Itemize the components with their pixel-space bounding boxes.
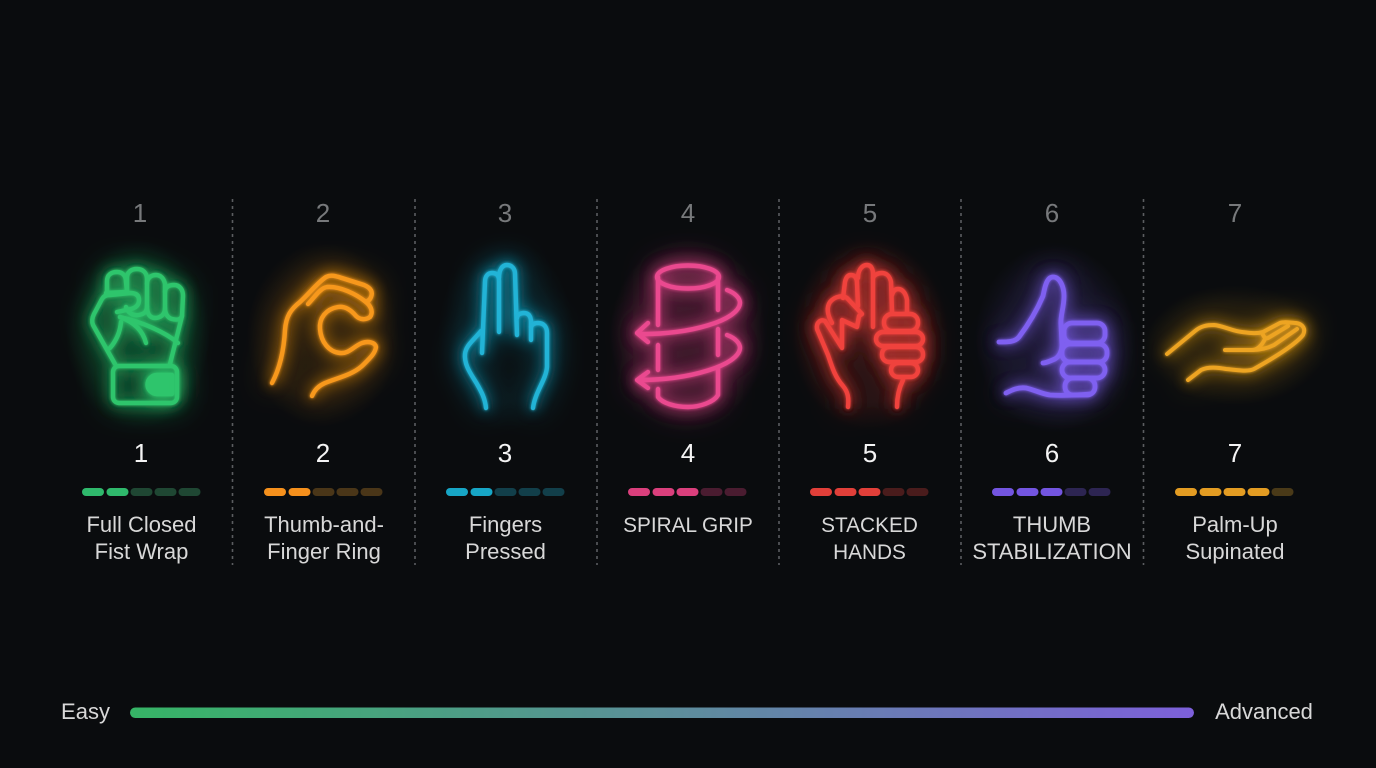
glow 4 (610, 239, 766, 431)
glow 7 (1146, 285, 1326, 405)
glow 5 (792, 239, 948, 431)
difficulty meter 3 (446, 488, 564, 496)
column 7: palm-up supinated (1146, 198, 1326, 564)
column 4: spiral grip (610, 198, 766, 537)
label 2: Finger Ring (267, 539, 381, 564)
number 1: 1 (134, 438, 148, 468)
icon: pressed fingers (465, 265, 547, 408)
step number 6: 6 (1045, 198, 1059, 228)
icon: thumb and finger ring (272, 276, 376, 396)
gradient scale bar (130, 708, 1194, 718)
column 2: thumb-and-finger ring (247, 198, 399, 564)
difficulty meter 4 (628, 488, 746, 496)
label 5: HANDS (833, 541, 906, 564)
difficulty meter 1 (82, 488, 200, 496)
difficulty meter 2 (264, 488, 382, 496)
label 7: Palm-Up (1192, 512, 1278, 537)
glow 2 (247, 243, 399, 427)
step number 5: 5 (863, 198, 877, 228)
icon: cylinder with spiral arrows (637, 266, 740, 407)
number 5: 5 (863, 438, 877, 468)
column 6: thumb stabilization (972, 198, 1135, 564)
number 2: 2 (316, 438, 330, 468)
number 7: 7 (1228, 438, 1242, 468)
icon: stacked hands (817, 265, 923, 407)
label 2: Thumb-and- (264, 512, 384, 537)
difficulty meter 6 (992, 488, 1110, 496)
difficulty meter 7 (1175, 488, 1294, 496)
difficulty meter 5 (810, 488, 928, 496)
label 3: Fingers (469, 512, 542, 537)
label 1: Fist Wrap (95, 539, 188, 564)
label: advanced: Advanced (1215, 699, 1313, 724)
step number 4: 4 (681, 198, 695, 228)
icon: open palm up (1167, 322, 1304, 380)
glow 1 (66, 241, 210, 429)
difficulty scale (61, 699, 1313, 724)
glow 3 (438, 239, 574, 431)
number 3: 3 (498, 438, 512, 468)
label: easy: Easy (61, 699, 110, 724)
label 6: THUMB (1013, 512, 1091, 537)
column 1: full closed fist wrap (66, 198, 210, 564)
icon: thumbs up fist (999, 277, 1107, 395)
label 3: Pressed (465, 539, 546, 564)
icon: closed fist (92, 269, 183, 403)
label 4: SPIRAL GRIP (623, 514, 753, 537)
column 5: stacked hands (792, 198, 948, 564)
label 1: Full Closed (86, 512, 197, 537)
column 3: fingers pressed (438, 198, 574, 564)
step number 7: 7 (1228, 198, 1242, 228)
step number 3: 3 (498, 198, 512, 228)
label 6: STABILIZATION (972, 539, 1132, 564)
glow 6 (975, 244, 1135, 432)
label 5: STACKED (821, 514, 918, 537)
label 7: Supinated (1185, 539, 1285, 564)
number 4: 4 (681, 438, 695, 468)
step number 2: 2 (316, 198, 330, 228)
step number 1: 1 (133, 198, 147, 228)
number 6: 6 (1045, 438, 1059, 468)
